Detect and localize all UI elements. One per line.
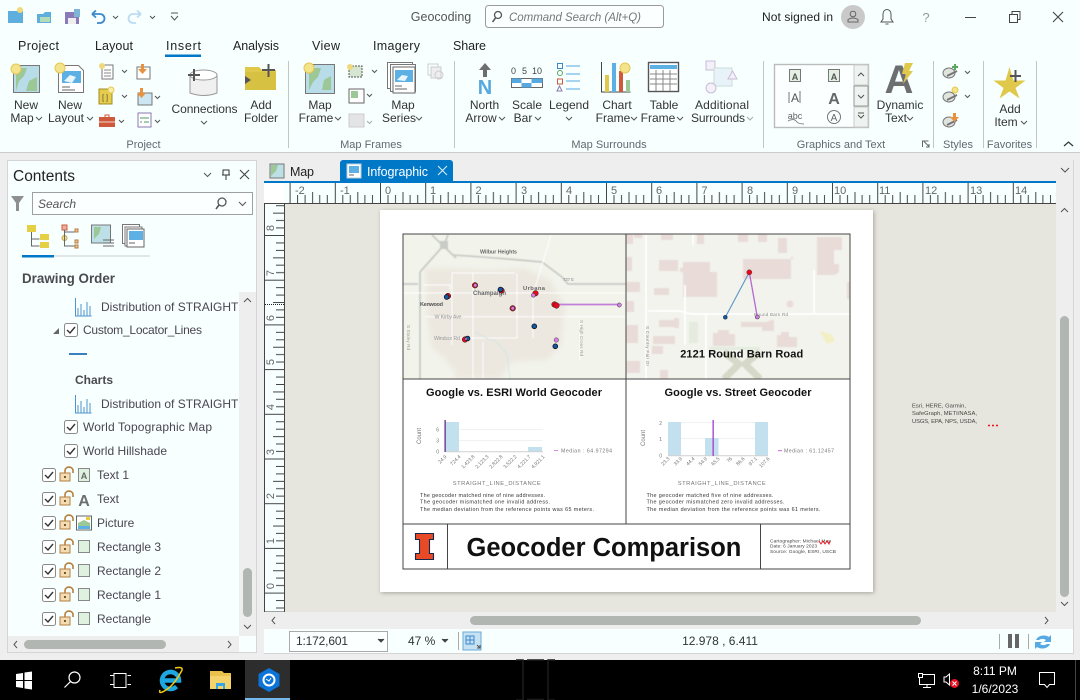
button: new map: New [14,98,38,112]
road labels: S Country Fair Dr [645,326,650,366]
top ruler: 2 [476,185,482,197]
command search box [486,6,664,28]
ribbon tabs: Project [18,39,60,53]
button: scale bar: 0 [511,66,516,76]
element: rectangle 3 [42,539,161,554]
scale box: 1:172,601 [296,634,348,648]
top ruler: 12 [925,185,937,197]
button: dynamic text: Dynamic [877,98,923,112]
panel controls [204,170,249,180]
histogram: 107.6 [758,456,772,469]
small project tools: [ ] [102,95,108,102]
ribbon tabs [18,39,486,57]
disabled icon [428,64,443,79]
chart summary: The geocoder matched five of nine addresses. [646,493,774,499]
histogram: 3 [436,438,439,444]
element: rectangle 1 [42,587,161,602]
button: new map [10,64,42,125]
chart summary [646,493,820,513]
panel: contents [8,160,256,652]
map labels: Wilbur Heights [480,250,517,256]
histogram: 23.3 [660,456,672,467]
ribbon group: project [10,63,278,151]
button: add folder: Add [250,98,272,112]
left ruler: 3 [265,449,277,455]
quick access toolbar [8,7,178,24]
long deviation line [555,304,619,306]
map labels: Windsor Rd [434,336,460,342]
small frame tools [347,64,377,127]
clock: 1/6/2023 [972,682,1019,696]
group label: project: Project [126,139,161,151]
element: text [42,490,119,506]
purple point [755,315,759,319]
clock [972,664,1019,696]
blue geocoder points [444,287,558,349]
buildings and roads [626,234,850,379]
layer: world topographic map: World Topographic Map [83,420,212,434]
button: dynamic text [877,58,923,125]
chart item: Distribution of STRAIGHT_ [101,397,245,411]
button: map series [382,62,422,125]
top ruler: -2 [295,185,305,197]
button: add folder [244,64,278,125]
tab: map: Map [290,165,314,179]
button: north arrow [465,63,505,125]
left ruler: 4 [265,404,277,410]
button: add folder: Folder [244,111,278,125]
left ruler: 8 [265,225,277,231]
road labels: Round Barn Rd [754,312,788,317]
map labels: S High Cross Rd [579,320,584,356]
top ruler: 4 [566,185,572,197]
ribbon tabs: Layout [95,39,134,53]
element: rectangle 1: Rectangle 1 [97,588,161,602]
top ruler: -1 [340,185,350,197]
histogram: 6 [436,428,439,434]
chart summary: The median deviation from the reference points was 61 meters. [646,507,820,513]
main title: Geocoder Comparison [466,534,741,562]
button: scale bar: 5 [522,66,527,76]
element: text 1 [42,467,129,482]
button: map series: Series [382,111,416,125]
file explorer icon [210,671,231,689]
search box: Search [38,197,76,211]
histogram: 54.9 [698,456,709,467]
text style gallery: A [831,72,838,82]
button: table frame: Frame [641,111,676,125]
histogram: 724.4 [449,454,463,467]
ribbon group: favorites [987,67,1033,151]
overflow marker [988,424,998,426]
element: text 1: A [81,471,88,481]
layer tree [42,298,245,626]
group label: favorites: Favorites [987,139,1033,151]
left ruler: 6 [265,315,277,321]
button: chart frame [596,62,637,125]
zoom level: 47 % [408,634,436,648]
top ruler: 6 [656,185,662,197]
style tools [943,64,970,127]
top ruler: 9 [792,185,798,197]
ribbon separators [288,61,1036,148]
button: scale bar: 10 [532,66,542,76]
button: dynamic text: Text [885,111,908,125]
layout horizontal scrollbar [264,612,1056,629]
coordinates: 12.978 , 6.411 [682,634,758,648]
element: picture [42,515,135,530]
histogram: Median : 64.97294 [561,448,612,454]
group label: styles: Styles [943,139,973,151]
text style gallery: abc [788,111,803,121]
button: legend [549,64,589,120]
button: map frame: Map [308,98,332,112]
chart item [76,395,245,413]
chart title: Google vs. Street Geocoder [664,387,812,399]
button: scale bar: Bar [514,111,532,125]
ribbon group: styles [943,64,973,151]
text style gallery: A [792,72,799,82]
tab: map [270,164,314,179]
text style gallery: A [831,113,838,124]
title block [416,534,836,562]
credits: Source: Google, ESRI, USCB [770,549,836,555]
credits [770,538,836,555]
histogram: 76 [726,456,734,464]
ribbon tabs: Imagery [373,39,421,53]
purple geocoder points [465,284,621,342]
button: connections [172,69,238,124]
chart title: Google vs. ESRI World Geocoder [426,387,603,399]
overflow attribution text: USGS, EPA, NPS, USDA, [912,419,977,425]
ribbon group: graphics and text [774,58,929,151]
map labels [406,250,584,356]
top ruler: 7 [702,185,708,197]
layer: world hillshade: World Hillshade [83,444,167,458]
element: rectangle 2 [42,563,161,578]
ribbon group: map surrounds [465,61,753,151]
histogram: 0 [659,454,662,460]
tab: infographic [340,160,453,183]
histogram: 3,522.2 [502,454,519,470]
histogram: STRAIGHT_LINE_DISTANCE [678,481,766,487]
view tabs [264,160,1069,183]
button: table frame: Table [650,98,679,112]
horizontal scrollbar [8,636,239,652]
histogram: 0 [436,450,439,456]
filter icon [11,196,24,211]
button: add item [994,67,1027,129]
overflow attribution text: Esri, HERE, Garmin, [912,404,966,410]
layout frame lines [403,234,850,569]
button: map frame [299,63,341,125]
top ruler: 0 [385,185,391,197]
histogram: Count [417,428,423,444]
element: text: A [78,493,90,510]
button: chart frame: Frame [596,111,631,125]
notification icon [1040,672,1054,688]
road labels [645,312,788,366]
left ruler: 7 [265,270,277,276]
button: table frame [641,62,683,125]
left ruler: 2 [265,493,277,499]
task view icon [110,674,130,688]
top ruler: 1 [430,185,436,197]
button: north arrow: Arrow [465,111,497,125]
dialog launcher [922,141,929,147]
histogram: 2 [659,421,662,427]
band below ribbon [0,153,1080,660]
left ruler: 1 [265,538,277,544]
map labels: Kenwood [420,302,443,308]
histogram: 4,921.1 [530,454,547,470]
button: add item: Item [994,115,1018,129]
element: text: Text [97,492,120,506]
histogram [641,420,834,487]
button: additional surrounds [691,61,753,125]
layout canvas [284,203,1056,612]
arcgis pro taskbar button [245,660,290,700]
chart summary: The geocoder mismatched zero invalid addresses. [646,500,784,506]
muted speaker icon [944,674,959,688]
left ruler: 0 [265,583,277,589]
map: champaign-urbana overview [403,234,626,379]
text style gallery [774,64,868,128]
element: rectangle 2: Rectangle 2 [97,564,161,578]
ribbon tabs: View [312,39,341,53]
line symbol [69,353,87,355]
illinois logo [416,534,434,560]
charts label: Charts [75,373,113,387]
blue geocoder line [726,274,748,316]
chart panel: google vs esri [417,387,612,513]
grid tool [458,632,481,650]
map labels: S Staley Rd [406,325,411,350]
map labels: Champaign [473,291,506,297]
button: new layout: New [58,98,82,112]
view icons [22,224,150,258]
button: scale bar [511,66,542,125]
top ruler: 14 [1015,185,1027,197]
red reference points [445,282,559,342]
tab: infographic: Infographic [367,165,428,179]
search icon [64,672,80,688]
scale box [290,632,388,652]
map title: 2121 Round Barn Road [680,348,803,360]
heading: contents: Contents [13,168,75,185]
refresh icon [1035,635,1051,649]
button: new layout [48,63,93,125]
chart summary: The median deviation from the reference points was 65 meters. [420,507,594,513]
windows logo [16,672,32,690]
reference point [747,270,752,275]
button: legend: Legend [549,98,589,112]
top ruler: 5 [611,185,617,197]
overflow attribution text [912,404,977,425]
chart item [76,298,245,316]
network tray icon [918,674,934,688]
button: north arrow: North [470,98,499,112]
collapse ribbon chevron [1064,142,1073,146]
small project tools [99,63,160,127]
button: dynamic text: A [885,58,913,102]
text style gallery: A [828,91,840,108]
group label: map surrounds: Map Surrounds [571,139,647,151]
histogram: 4,221.7 [516,454,533,470]
histogram: 33.9 [673,456,684,467]
pause drawing [1000,634,1028,649]
histogram: 2,123.3 [474,454,491,470]
histogram: 1 [659,437,662,443]
account and window controls [762,5,1063,29]
chart summary: The geocoder matched nine of nine addresses. [420,493,545,499]
internet explorer icon [160,668,182,692]
layout vertical scrollbar [1056,183,1073,612]
histogram: Median : 61.12457 [784,449,834,455]
element: rectangle: Rectangle [97,612,151,626]
chart summary [420,493,594,513]
histogram [417,420,612,487]
histogram: 24.9 [437,454,449,465]
clock: 8:11 PM [973,664,1017,678]
left ruler: 5 [265,359,277,365]
button: map frame: Frame [299,111,334,125]
purple geocoder line [749,272,757,317]
element: rectangle [42,611,151,626]
button: connections: Connections [172,102,238,116]
command search box: Command Search (Alt+Q) [509,12,641,24]
ribbon group: map frames [299,62,443,151]
layout page [380,210,873,592]
map: 2121 round barn road detail [626,234,850,379]
panel outline [264,653,1074,654]
account and window controls: ? [922,10,930,25]
chart summary: The geocoder mismatched one invalid address. [420,500,550,506]
histogram: 2,822.8 [488,454,505,470]
histogram: STRAIGHT_LINE_DISTANCE [453,481,541,487]
chart item: Distribution of STRAIGHT_ [101,300,245,314]
zoom level [408,634,448,648]
heading: drawing order: Drawing Order [22,271,116,286]
status bar [264,629,1073,653]
blue point [723,315,727,319]
histogram: 86.6 [735,456,747,467]
built-up areas [425,268,565,379]
text style gallery: A [791,91,799,105]
button: additional surrounds: Additional [695,98,749,112]
group label: map frames: Map Frames [340,139,402,151]
button: additional surrounds: Surrounds [691,111,745,125]
button: scale bar: Scale [512,98,542,112]
account and window controls: Not signed in [762,10,833,24]
button: add item: Add [999,102,1021,116]
ribbon tabs: Analysis [233,39,279,53]
button: chart frame: Chart [602,98,632,112]
ribbon tabs: Share [453,39,486,53]
element: picture: Picture [97,516,135,530]
taskbar [0,660,1080,700]
element: text 1: Text 1 [97,468,129,482]
top ruler [264,183,1056,204]
button: new map: Map [10,111,34,125]
button: map series: Map [391,98,415,112]
vertical scrollbar [239,292,256,636]
top ruler: 8 [747,185,753,197]
element: rectangle 3: Rectangle 3 [97,540,161,554]
credits: Date: 6 January 2023 [770,544,817,550]
search box [32,192,252,214]
group label: graphics and text: Graphics and Text [797,139,885,151]
cursor ghost [516,660,555,700]
window title: Geocoding [411,10,471,24]
map labels: 737 E [563,277,574,282]
histogram: 97.1 [748,456,759,467]
histogram: 65.5 [710,456,722,467]
button: new layout: Layout [48,111,85,125]
left ruler [264,204,284,612]
top ruler: 13 [970,185,982,197]
chart panel: google vs street [641,387,834,513]
overflow attribution text: SafeGraph, METI/NASA, [912,411,977,417]
top ruler: 11 [879,185,890,197]
top ruler: 3 [521,185,527,197]
histogram: Count [641,430,647,446]
top ruler: 10 [834,185,846,197]
layer: custom locator lines: Custom_Locator_Lines [83,323,202,337]
histogram: 44.4 [685,456,697,467]
histogram: 1,423.8 [460,454,477,470]
roads and stream [403,235,626,379]
map labels: Urbana [523,286,546,292]
credits: Cartographer: Michael Map [770,538,831,544]
map labels: W Kirby Ave [434,314,462,320]
spell check squiggle [819,541,830,544]
button: north arrow: N [478,77,492,99]
ribbon tabs: Insert [166,39,202,53]
